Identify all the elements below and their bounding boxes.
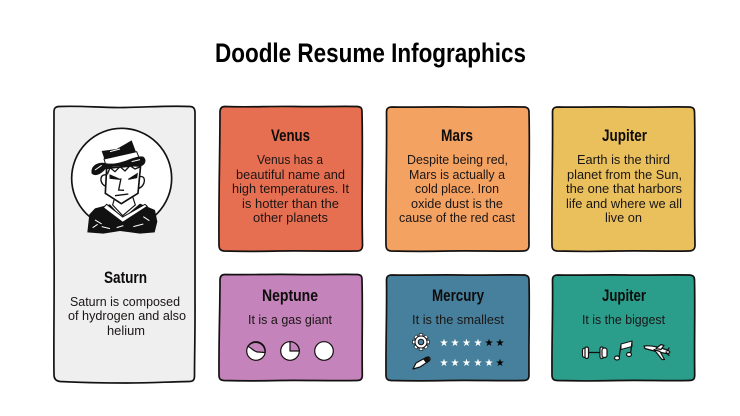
card background: Neptune: [219, 274, 362, 381]
neck: [113, 197, 135, 216]
avatar circle: [72, 128, 172, 228]
rating stars: row one: ★: [485, 338, 494, 349]
rating stars: row two: ★: [440, 358, 449, 369]
icon: dumbbell: [582, 347, 607, 358]
panel: Jupiter bottom: [552, 275, 695, 381]
body text: Saturn: of hydrogen and also: [68, 309, 186, 323]
body text: Mars: Despite being red,: [407, 153, 508, 167]
rating stars: row one: [440, 338, 505, 349]
body text: Mars: oxide dust is the: [411, 197, 503, 211]
body text: Jupiter bottom: It is the biggest: [582, 313, 666, 327]
card background: Mars: [386, 107, 529, 251]
body text: Venus: Venus has a: [257, 153, 323, 167]
body text: Saturn: [68, 295, 186, 338]
heading: Mars: Mars: [441, 126, 473, 145]
panel: Neptune: [219, 274, 362, 381]
body text: Mars: cause of the red cast: [399, 211, 516, 225]
body text: Venus: high temperatures. It: [232, 182, 350, 196]
eyes and mouth: [110, 174, 137, 179]
panel: Venus: [219, 106, 362, 251]
rating stars: row two: ★: [451, 358, 460, 369]
rating stars: row two: ★: [496, 358, 505, 369]
panel: Jupiter top: [552, 107, 695, 251]
heading: Venus: Venus: [271, 126, 310, 145]
heading: Jupiter bottom: Jupiter: [602, 286, 646, 305]
rating stars: row one: ★: [462, 338, 471, 349]
title: Doodle Resume Infographics: [215, 38, 526, 68]
icon: music notes: [614, 341, 632, 360]
rating stars: row two: ★: [485, 358, 494, 369]
rating stars: row one: ★: [451, 338, 460, 349]
icon: gear: [412, 334, 430, 350]
rating stars: row one: ★: [474, 338, 483, 349]
panel: Mars: [386, 107, 529, 251]
pie: full: [315, 342, 333, 360]
rating stars: row one: ★: [496, 338, 505, 349]
body text: Jupiter top: life and where we all: [566, 197, 682, 211]
face: [105, 165, 141, 204]
ears: [101, 175, 144, 188]
heading: Mercury: Mercury: [432, 286, 484, 305]
rating stars: row two: ★: [474, 358, 483, 369]
body text: Mars: cold place. Iron: [415, 182, 499, 196]
hat: [102, 140, 137, 166]
pie charts: [247, 342, 333, 360]
body text: Jupiter top: planet from the Sun,: [567, 168, 682, 182]
body text: Jupiter top: Earth is the third: [577, 153, 670, 167]
card background: Jupiter bottom: [552, 275, 695, 381]
panel: Mercury: [386, 275, 529, 381]
card background: Mercury: [386, 275, 529, 381]
body text: Venus: [232, 153, 350, 225]
portrait avatar: [72, 128, 172, 234]
hair: [107, 166, 141, 174]
body text: Venus: beautiful name and: [236, 168, 345, 182]
rating stars: row one: ★: [440, 338, 449, 349]
icon: pencil: [413, 356, 430, 369]
rating stars: row two: ★: [462, 358, 471, 369]
pie: one third: [247, 342, 265, 360]
body text: Mars: [399, 153, 516, 225]
icon: airplane: [644, 344, 670, 360]
body text: Jupiter top: [566, 153, 682, 225]
heading: Jupiter top: Jupiter: [602, 126, 647, 145]
body text: Saturn: helium: [107, 324, 145, 338]
heading: Saturn: Saturn: [104, 268, 147, 287]
shoulders: [87, 204, 157, 234]
body text: Venus: is hotter than the: [242, 197, 339, 211]
heading: Neptune: Neptune: [262, 286, 318, 305]
body text: Mercury: It is the smallest: [412, 313, 505, 327]
card background: Jupiter top: [552, 107, 695, 251]
card background: Saturn: [54, 106, 195, 383]
body text: Saturn: Saturn is composed: [70, 295, 180, 309]
rating stars: row two: [440, 358, 505, 369]
body text: Venus: other planets: [253, 211, 328, 225]
body text: Mars: Mars is actually a: [409, 168, 505, 182]
body text: Jupiter top: live on: [605, 211, 642, 225]
panel: Saturn: [54, 106, 195, 383]
body text: Jupiter top: the one that harbors: [566, 182, 682, 196]
pie: one quarter: [281, 342, 299, 360]
card background: Venus: [219, 106, 362, 251]
body text: Neptune: It is a gas giant: [248, 313, 333, 327]
